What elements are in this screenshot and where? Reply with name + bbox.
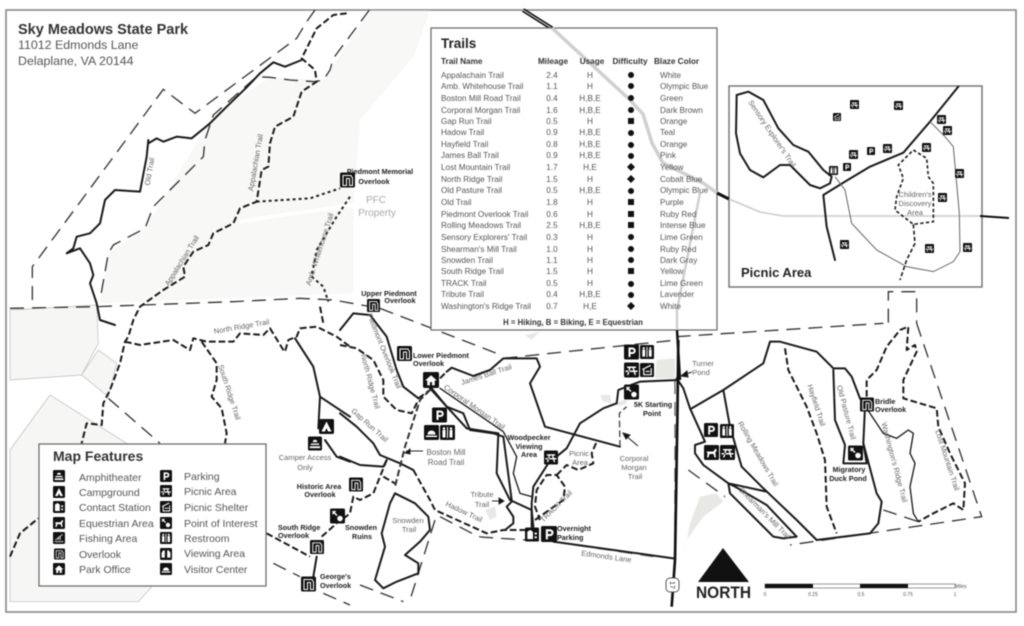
icon: route 17 shield: 17	[668, 581, 675, 589]
table rows: Gap Run Trail	[441, 117, 492, 126]
table rows: 2.5	[546, 221, 558, 230]
table rows: H	[587, 175, 593, 184]
bold overlook and feature labels	[278, 167, 906, 590]
rotated trail labels: Old Trail	[143, 157, 156, 186]
usage key: H = Hiking, B = Biking, E = Equestrian	[503, 318, 643, 327]
legend labels: Amphitheater	[79, 472, 142, 484]
rotated trail labels: Appalachian Trail	[246, 133, 265, 192]
difficulty symbols	[627, 72, 635, 310]
table rows: Washington's Ridge Trail	[441, 302, 531, 311]
trails heading: Trails	[441, 36, 476, 51]
scale bar: Miles	[955, 584, 967, 590]
gray place labels: Trail	[402, 525, 416, 534]
trails: northern section	[10, 13, 350, 557]
table rows: Hadow Trail	[441, 128, 484, 137]
panel: map features legend	[39, 444, 266, 586]
trails: eastern section	[677, 327, 965, 540]
table rows: Piedmont Overlook Trail	[441, 210, 529, 219]
Sensory Explorers' Trail loop	[736, 92, 832, 188]
table rows: 1.6	[546, 106, 558, 115]
table rows: White	[660, 302, 681, 311]
road through panels	[552, 28, 1009, 380]
table rows: 0.6	[546, 210, 558, 219]
rotated trail labels: Amb. Whitehouse Trail	[304, 212, 336, 286]
north arrow: NORTH	[696, 583, 751, 602]
North and South Ridge Trails	[125, 307, 350, 577]
table rows: H	[587, 82, 593, 91]
table rows: Tribute Trail	[441, 290, 484, 299]
bold overlook and feature labels: Overlook	[358, 177, 390, 186]
picnic area inset map	[736, 87, 960, 280]
scale bar: 1	[954, 592, 957, 598]
gray place labels: Pond	[692, 368, 710, 377]
table rows: 1.5	[546, 267, 558, 276]
legend labels: Visitor Center	[184, 564, 248, 576]
gray place labels	[279, 195, 714, 534]
bold overlook and feature labels: Overlook	[875, 405, 906, 414]
bold overlook and feature labels: Overnight	[557, 524, 592, 533]
rotated trail labels: Hayfield Trail	[805, 383, 827, 428]
gray place labels: Property	[358, 208, 396, 219]
legend labels: Viewing Area	[184, 548, 245, 560]
table rows: Lavender	[660, 290, 694, 299]
table rows: H,B,E	[579, 151, 601, 160]
table rows: Lost Mountain Trail	[441, 163, 510, 172]
legend labels: Park Office	[79, 564, 131, 576]
table rows: Orange	[660, 117, 688, 126]
table rows: 0.8	[546, 140, 558, 149]
table rows: H,B,E	[579, 186, 601, 195]
table rows: 1.7	[546, 163, 558, 172]
legend labels: Equestrian Area	[79, 518, 154, 530]
table header row: Usage	[580, 57, 605, 66]
table header row: Difficulty	[612, 57, 648, 66]
scale bar: 0.5	[858, 592, 865, 598]
bold overlook and feature labels: Overlook	[320, 581, 351, 590]
table rows: 1.5	[546, 175, 558, 184]
table rows: H,B,E	[579, 94, 601, 103]
gray place labels: Tribute	[470, 490, 494, 499]
table rows: Purple	[660, 198, 684, 207]
table rows: Pink	[660, 151, 677, 160]
Appalachian Trail	[82, 13, 347, 443]
legend labels: Campground	[79, 487, 140, 499]
legend labels: Parking	[184, 471, 220, 483]
rotated trail labels: James Ball Trail	[460, 362, 513, 387]
bold overlook and feature labels: Area	[521, 450, 538, 459]
table rows: H,E	[583, 302, 597, 311]
gray place labels: Snowden	[392, 516, 424, 525]
table rows: 1.1	[546, 82, 558, 91]
legend labels: Point of Interest	[184, 518, 258, 530]
table rows: 2.4	[546, 71, 558, 80]
gray place labels: PFC	[366, 195, 386, 206]
gray place labels: Area	[572, 458, 589, 467]
bold overlook and feature labels: Point	[643, 409, 662, 418]
table rows: H,B,E	[579, 140, 601, 149]
Route 17	[672, 340, 678, 607]
legend labels: Overlook	[79, 549, 122, 561]
picnic area road	[823, 87, 958, 260]
scale bar: 0.25	[808, 592, 818, 598]
bold overlook and feature labels: Parking	[557, 533, 583, 542]
panel: picnic area background	[729, 86, 982, 287]
table rows: 0.7	[546, 302, 558, 311]
table rows: Boston Mill Road Trail	[441, 94, 521, 103]
table header row	[441, 57, 700, 66]
gray place labels: Corporal	[620, 454, 649, 463]
table rows: H	[587, 117, 593, 126]
table rows: Sensory Explorers' Trail	[441, 233, 527, 242]
picnic area loop path	[835, 122, 960, 272]
bold overlook and feature labels: Overlook	[384, 296, 416, 305]
table rows: Corporal Morgan Trail	[441, 106, 520, 115]
bold overlook and feature labels: Overlook	[413, 359, 444, 368]
Children's Discovery Area path	[895, 150, 933, 224]
gray place labels: Trail	[628, 472, 642, 481]
table rows: H	[587, 267, 593, 276]
table rows: 0.4	[546, 94, 558, 103]
gray place labels: Road Trail	[428, 458, 464, 467]
legend labels	[79, 471, 258, 576]
bold overlook and feature labels: Viewing	[515, 442, 543, 451]
table rows: H	[587, 256, 593, 265]
rotated trail labels: North Ridge Trail	[213, 317, 270, 336]
gray place labels: Morgan	[621, 463, 647, 472]
rotated trail labels	[143, 133, 962, 564]
scale bar: 0	[764, 592, 767, 598]
table rows: Lime Green	[660, 279, 703, 288]
rotated trail labels: Lost Mountain Trail	[933, 429, 962, 492]
legend icons	[53, 470, 172, 575]
picnic area labels: Children's	[898, 190, 932, 199]
table rows: Orange	[660, 140, 688, 149]
ponds	[485, 332, 723, 560]
gray place labels: Only	[297, 463, 313, 472]
table header row: Blaze Color	[654, 57, 700, 66]
bold overlook and feature labels: 5K Starting	[634, 400, 672, 409]
rotated trail labels: North Ridge Trail	[359, 353, 382, 410]
rotated trail labels: TRACK Trail	[538, 488, 574, 524]
bold overlook and feature labels: Ruins	[352, 532, 372, 541]
scale bar	[764, 584, 967, 598]
table rows: Hayfield Trail	[441, 140, 489, 149]
bold overlook and feature labels: George's	[320, 572, 351, 581]
bold overlook and feature labels: South Ridge	[278, 523, 320, 532]
table rows: H,B,E	[579, 290, 601, 299]
table rows: Intense Blue	[660, 221, 706, 230]
highway and road lines	[523, 10, 678, 607]
table rows: Ruby Red	[660, 245, 697, 254]
rotated trail labels: Rolling Meadows Trail	[736, 420, 781, 488]
picnic area labels: Area	[907, 208, 924, 217]
table rows: Teal	[660, 128, 675, 137]
neighbouring property shading	[10, 11, 430, 602]
bold overlook and feature labels: Piedmont Memorial	[347, 167, 413, 176]
table rows: White	[660, 71, 681, 80]
rotated trail labels: Piedmont Overlook Trail	[365, 312, 404, 390]
panel: trails table background	[431, 28, 717, 330]
legend heading: Map Features	[53, 448, 143, 464]
bold overlook and feature labels: Upper Piedmont	[361, 289, 417, 298]
gray place labels: Boston Mill	[426, 448, 466, 457]
trails: central section	[125, 307, 678, 588]
map title block: Delaplane, VA 20144	[18, 54, 134, 68]
map title block	[18, 22, 189, 68]
table rows: Dark Brown	[660, 106, 703, 115]
table rows: H,E	[583, 163, 597, 172]
rotated trail labels: Corporal Morgan Trail	[442, 382, 507, 432]
table rows: H	[587, 279, 593, 288]
rotated trail labels: Gap Run Trail	[349, 406, 390, 444]
picnic area labels	[741, 98, 932, 280]
table rows: 1.1	[546, 256, 558, 265]
bold overlook and feature labels: Bridle	[875, 397, 895, 406]
table rows: Rolling Meadows Trail	[441, 221, 521, 230]
table rows: Yellow	[660, 267, 683, 276]
bold overlook and feature labels: Woodpecker	[507, 433, 551, 442]
table rows: Cobalt Blue	[660, 175, 703, 184]
table rows: 1.8	[546, 198, 558, 207]
rotated trail labels: Hadow Trail	[444, 499, 484, 524]
table rows: H	[587, 233, 593, 242]
table rows: Olympic Blue	[660, 82, 709, 91]
map title block: Sky Meadows State Park	[18, 22, 189, 38]
table rows: Dark Gray	[660, 256, 698, 265]
picnic area icons	[829, 100, 972, 253]
table rows: Ruby Red	[660, 210, 697, 219]
table rows: Amb. Whitehouse Trail	[441, 82, 524, 91]
legend labels: Picnic Shelter	[184, 502, 249, 514]
table rows	[441, 71, 709, 311]
trails table	[441, 36, 709, 327]
gray place labels: Picnic	[569, 449, 589, 458]
table header row: Mileage	[538, 57, 568, 66]
table rows: South Ridge Trail	[441, 267, 504, 276]
rotated trail labels: South Ridge Trail	[216, 363, 243, 421]
callout arrows	[405, 371, 692, 504]
Ambassador Whitehouse Trail	[257, 188, 350, 302]
table rows: H	[587, 71, 593, 80]
map icons	[301, 172, 874, 592]
rotated trail labels: Shearman's Mill Trail	[737, 486, 793, 541]
table rows: 0.5	[546, 186, 558, 195]
rotated trail labels: Edmonds Lane	[581, 549, 632, 564]
table rows: 0.9	[546, 151, 558, 160]
icon: route 17 shield	[666, 578, 679, 592]
table rows: Old Pasture Trail	[441, 186, 502, 195]
table rows: 0.5	[546, 117, 558, 126]
Route 50 double line at top	[523, 10, 553, 29]
table rows: North Ridge Trail	[441, 175, 503, 184]
bold overlook and feature labels: Lower Piedmont	[413, 351, 470, 360]
picnic area labels: Discovery	[899, 199, 932, 208]
table header row: Trail Name	[441, 57, 483, 66]
rotated trail labels: Appalachian Trail	[163, 234, 201, 287]
picnic area labels: Sensory Explorer's Trail	[746, 98, 798, 169]
table rows: H,B,E	[579, 128, 601, 137]
gray place labels: Trail	[475, 500, 489, 509]
picnic area labels: Picnic Area	[741, 265, 812, 280]
scale bar: 0.75	[903, 592, 913, 598]
table rows: H	[587, 198, 593, 207]
table rows: Green	[660, 94, 683, 103]
table rows: 0.5	[546, 279, 558, 288]
legend labels: Fishing Area	[79, 533, 138, 545]
north arrow	[696, 548, 751, 602]
discovery area spur	[900, 224, 915, 280]
legend labels: Contact Station	[79, 502, 151, 514]
rotated trail labels: Old Pasture Trail	[835, 384, 858, 441]
gray place labels: Camper Access	[279, 453, 332, 462]
bold overlook and feature labels: Overlook	[278, 531, 309, 540]
table rows: 0.3	[546, 233, 558, 242]
table rows: H	[587, 245, 593, 254]
bold overlook and feature labels: Overlook	[304, 490, 336, 499]
table rows: Yellow	[660, 163, 683, 172]
bold overlook and feature labels: Historic Area	[297, 482, 342, 491]
table rows: Olympic Blue	[660, 186, 709, 195]
Old Trail	[67, 60, 302, 325]
legend labels: Picnic Area	[184, 486, 237, 498]
map title block: 11012 Edmonds Lane	[18, 38, 138, 52]
bold overlook and feature labels: Duck Pond	[829, 474, 867, 483]
bold overlook and feature labels: Migratory	[833, 465, 865, 474]
rotated trail labels: Washington's Ridge Trail	[879, 421, 910, 504]
table rows: Appalachain Trail	[441, 71, 504, 80]
legend labels: Restroom	[184, 533, 230, 545]
table rows: Snowden Trail	[441, 256, 493, 265]
table rows: 1.0	[546, 245, 558, 254]
table rows: H,B,E	[579, 106, 601, 115]
table rows: 0.4	[546, 290, 558, 299]
bold overlook and feature labels: Snowden	[345, 523, 377, 532]
Appalachian Trail southern spur	[10, 518, 38, 557]
table rows: Old Trail	[441, 198, 472, 207]
table rows: James Ball Trail	[441, 151, 499, 160]
gray place labels: Turner	[692, 359, 714, 368]
table rows: 0.9	[546, 128, 558, 137]
table rows: Lime Green	[660, 233, 703, 242]
table rows: H	[587, 210, 593, 219]
table rows: TRACK Trail	[441, 279, 487, 288]
table rows: Shearman's Mill Trail	[441, 245, 517, 254]
table rows: H,B,E	[579, 221, 601, 230]
